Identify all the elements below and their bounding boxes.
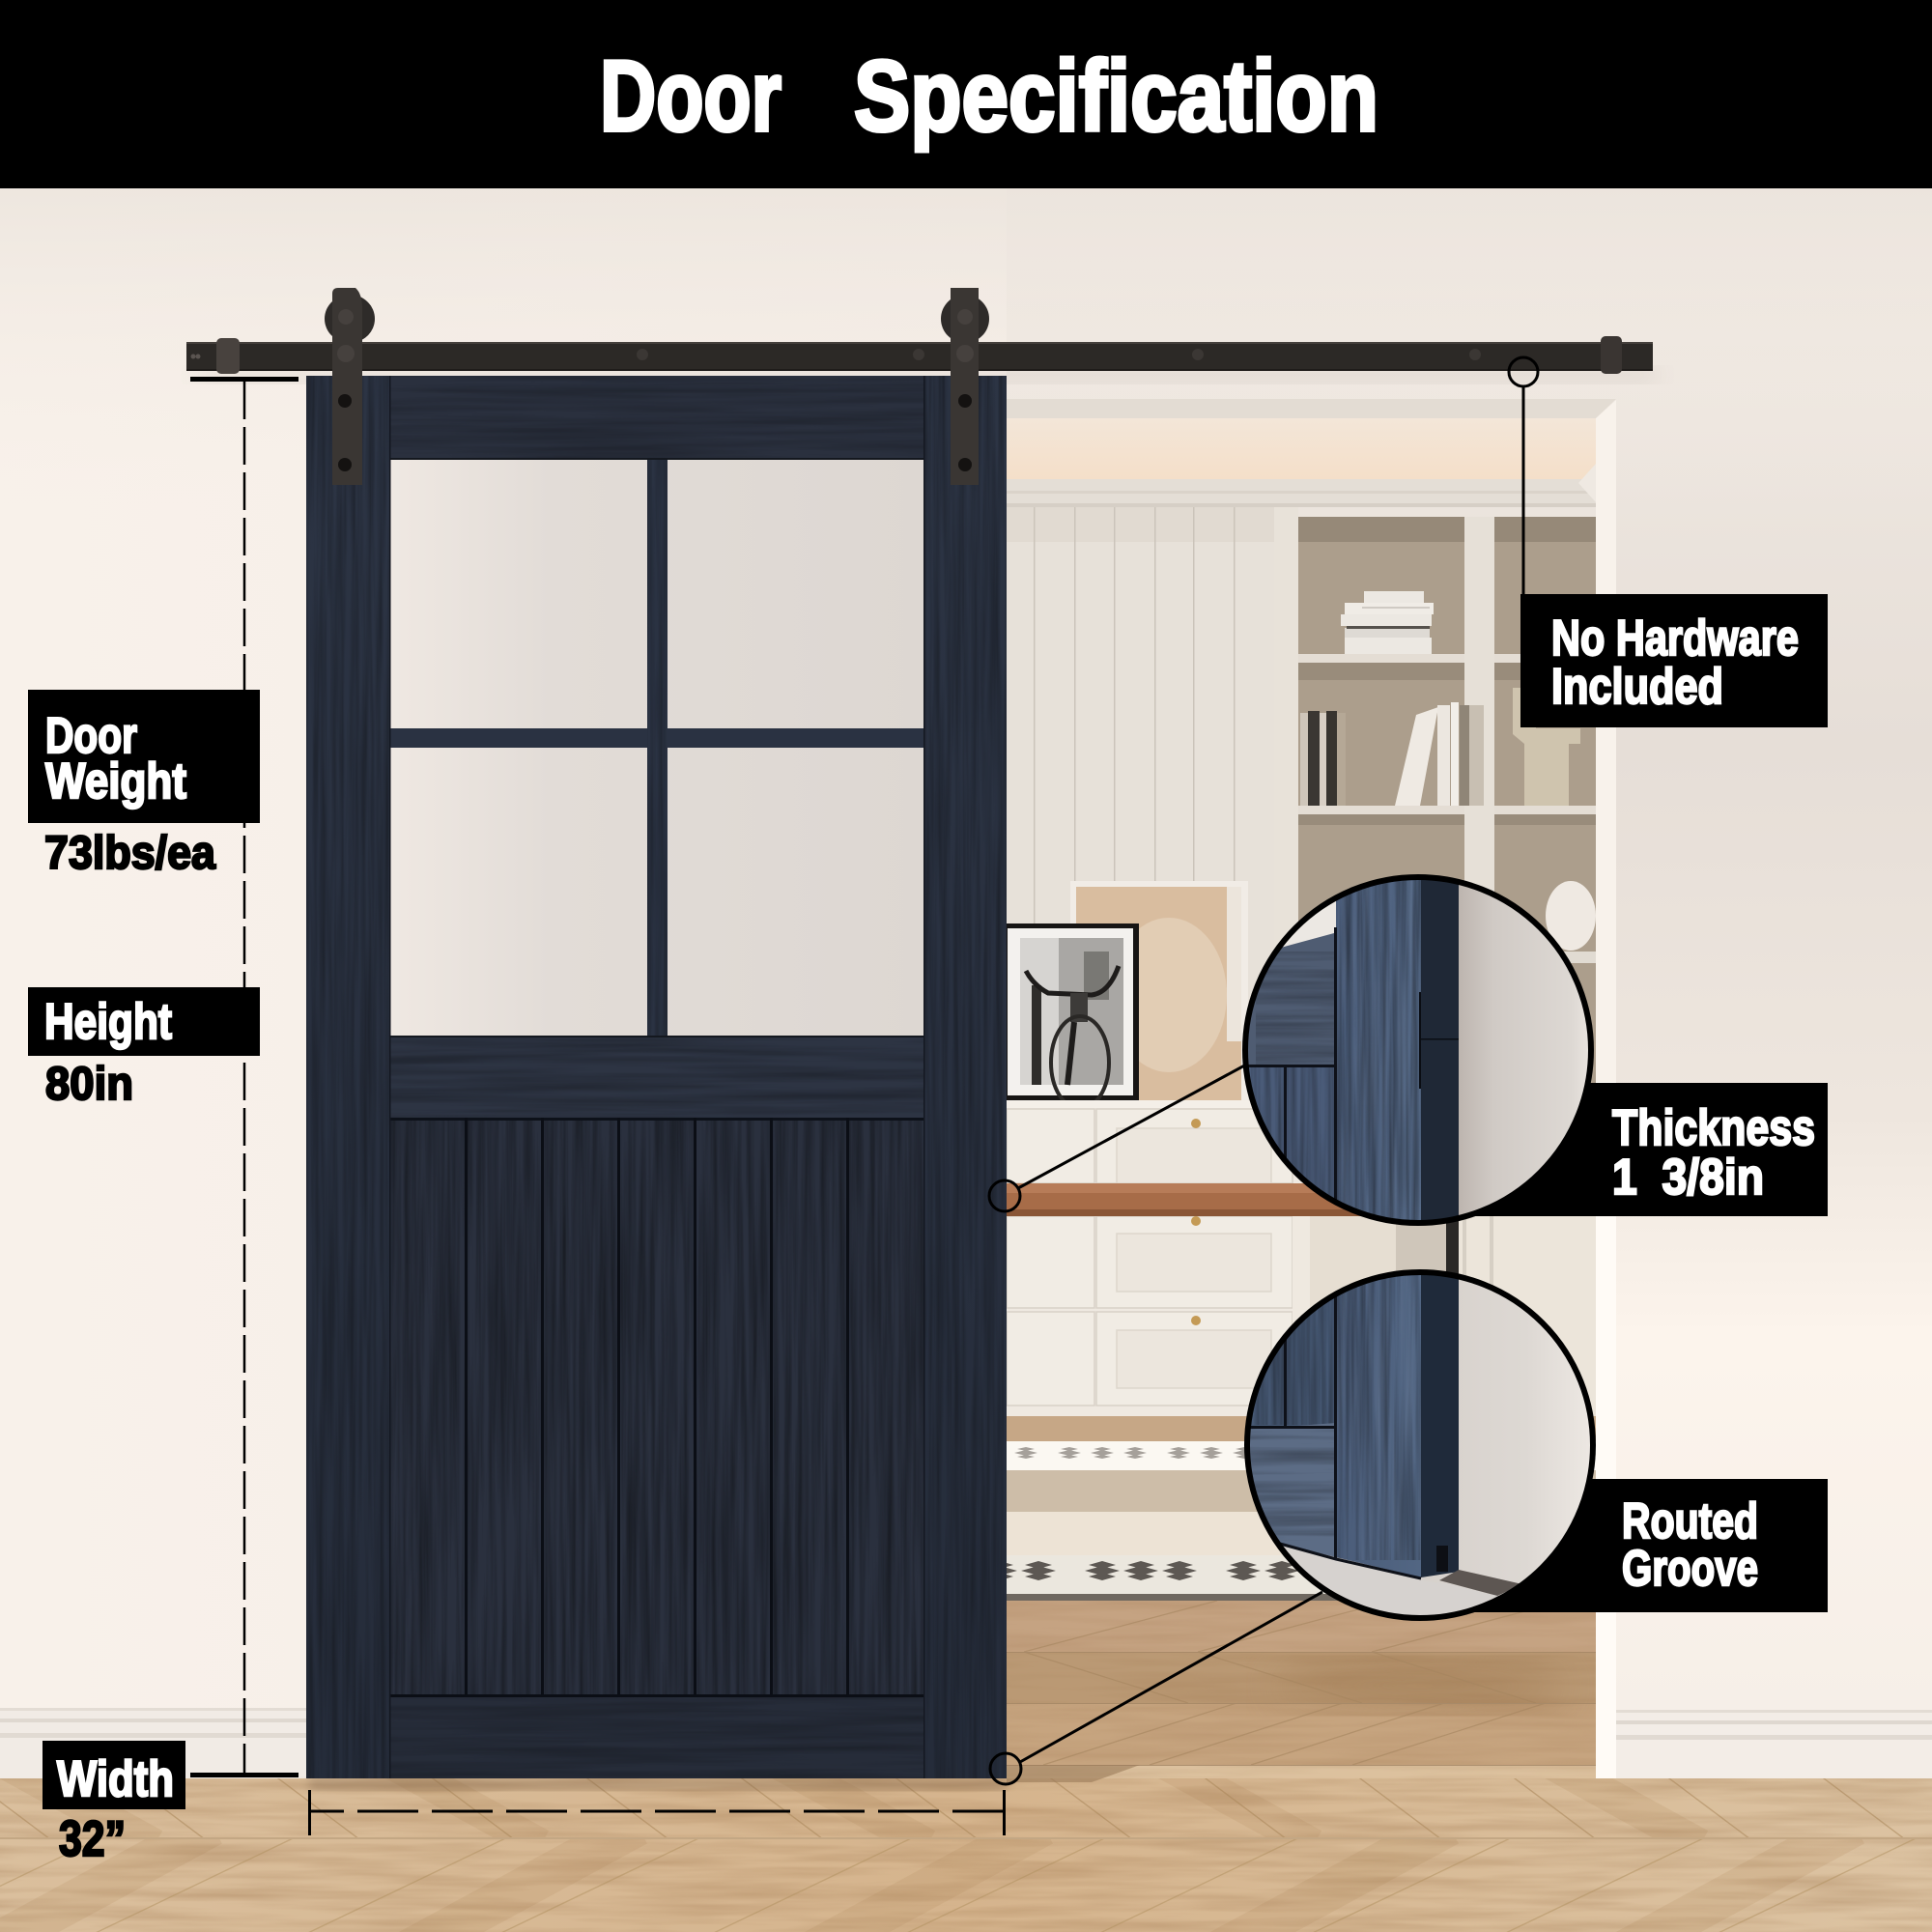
value: width: 32” <box>59 1811 126 1867</box>
panelled wall <box>1007 507 1274 1106</box>
plank panel <box>389 1118 923 1695</box>
label: routed groove: Groove <box>1622 1541 1758 1597</box>
floor <box>0 1778 1932 1932</box>
room ceiling and soffit <box>1007 399 1616 507</box>
soft shadow of track <box>198 367 1657 383</box>
bottom rail <box>389 1694 923 1778</box>
label: door weight <box>28 690 260 823</box>
magnifier: routed groove <box>1241 1270 1597 1623</box>
header band <box>0 0 1932 188</box>
books middle shelf <box>1300 702 1484 806</box>
baseboard right <box>1616 1710 1932 1778</box>
sculpture <box>1513 688 1580 806</box>
title: Specification <box>854 41 1378 153</box>
value: height: 80in <box>45 1059 133 1110</box>
left stile <box>306 376 390 1778</box>
room seen through the opening <box>1007 399 1616 1782</box>
label: routed groove <box>1468 1479 1828 1612</box>
magnifier: door edge thickness <box>1241 874 1599 1227</box>
leader: no hardware <box>1509 357 1538 594</box>
height dimension line <box>190 377 298 1777</box>
label: no hardware included: No Hardware <box>1551 611 1799 667</box>
right stile <box>924 376 1007 1778</box>
label: height: Height <box>44 994 172 1050</box>
stopper left <box>216 338 240 374</box>
baseboard left <box>0 1708 309 1778</box>
label: door weight: Door <box>45 708 137 764</box>
hanger left <box>325 288 375 485</box>
stopper right <box>1601 336 1622 374</box>
door jamb <box>1596 400 1616 1778</box>
glass muntins <box>390 460 923 1037</box>
value: door weight: 73lbs/ea <box>44 828 215 879</box>
label: no hardware included: Included <box>1551 659 1723 715</box>
leader: routed groove <box>990 1592 1322 1784</box>
title <box>600 41 1378 153</box>
label: thickness: Thickness <box>1612 1100 1815 1156</box>
label: height <box>28 987 260 1056</box>
title: Door <box>600 41 781 153</box>
bookcase <box>1274 507 1596 1116</box>
framed bicycle photo <box>1007 923 1139 1109</box>
barn door track <box>186 336 1653 374</box>
vase <box>1546 881 1596 951</box>
room floor and rug <box>1007 1416 1596 1601</box>
books top shelf <box>1341 591 1434 654</box>
label: width <box>43 1741 185 1809</box>
wood counter <box>1007 1183 1393 1216</box>
lock rail <box>389 1036 923 1118</box>
label: width: Width <box>57 1751 174 1807</box>
label: no hardware included <box>1520 594 1828 727</box>
label: door weight: Weight <box>45 753 186 810</box>
leaning art print <box>1070 881 1248 1100</box>
cabinets <box>1007 1100 1596 1416</box>
door <box>306 376 1007 1778</box>
width dimension line <box>308 1790 1006 1835</box>
label: routed groove: Routed <box>1622 1493 1758 1549</box>
hanger right <box>941 288 989 485</box>
leader: thickness <box>989 1064 1248 1211</box>
label: thickness: 1 3/8in <box>1612 1150 1764 1206</box>
window glass <box>390 460 923 1037</box>
room herringbone floor <box>1007 1601 1596 1782</box>
label: thickness <box>1468 1083 1828 1216</box>
top rail <box>389 376 923 460</box>
